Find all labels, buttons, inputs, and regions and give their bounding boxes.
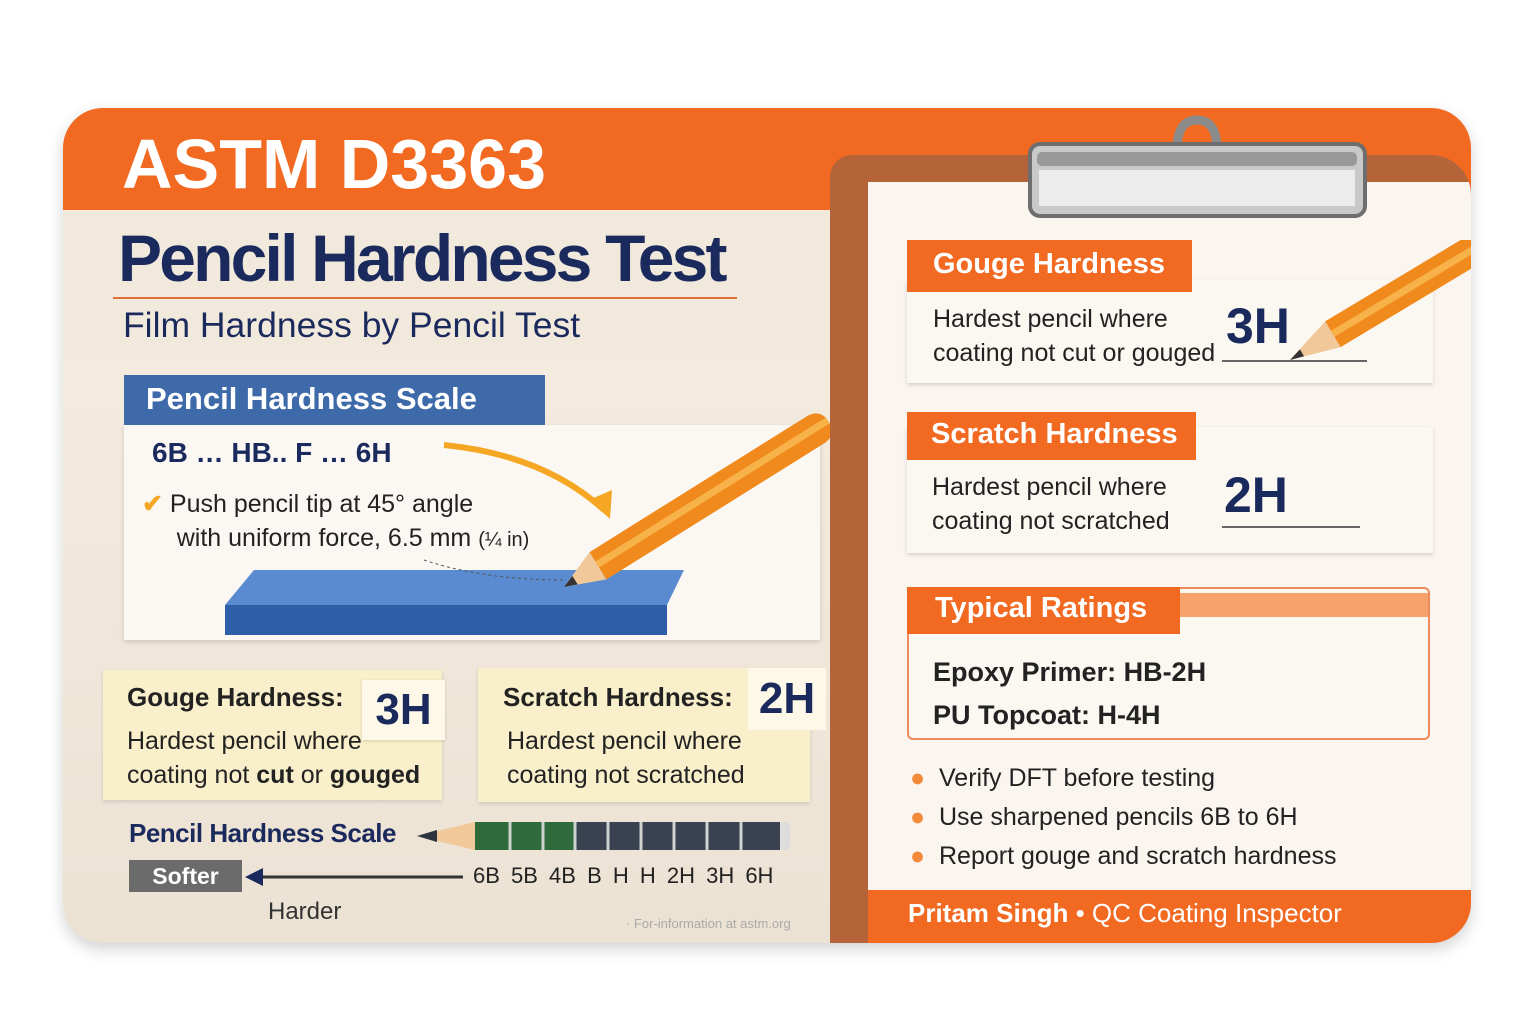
panel: scratch hardness (right): Scratch Hardness — [931, 418, 1178, 450]
harder label: Harder — [268, 898, 341, 925]
badge 2H — [748, 668, 826, 730]
instruction text — [142, 490, 529, 552]
heading: Pencil Hardness Test — [118, 221, 725, 295]
panel: scratch hardness note: Hardest pencil where — [507, 727, 742, 755]
icon: clipboard clip — [1028, 116, 1367, 218]
panel: gouge hardness (right): 3H — [1226, 298, 1290, 354]
softer label: Softer — [152, 863, 219, 889]
badge 2H: 2H — [759, 674, 815, 723]
panel: gouge hardness note: Hardest pencil where — [127, 727, 362, 755]
instruction text: with uniform force, 6.5 mm (¼ in) — [177, 524, 529, 552]
footnote: · For-information at astm.org — [626, 916, 791, 931]
panel: typical ratings: Typical Ratings — [935, 592, 1147, 624]
bullet list — [910, 764, 1336, 870]
scale text: 6B … HB.. F … 6H — [152, 437, 392, 468]
paper — [868, 182, 1471, 943]
title: ASTM D3363 — [122, 125, 546, 203]
panel: typical ratings: Epoxy Primer: HB-2H — [933, 657, 1206, 687]
panel: scratch hardness (right): Hardest pencil where — [932, 473, 1167, 501]
illustration: slab, arrow, pencil — [225, 413, 830, 635]
arrow: softer — [245, 868, 463, 886]
scale grades: 6B 5B 4B B H H 2H 3H 6H — [473, 863, 773, 888]
panel: scratch hardness (right): coating not scratched — [932, 507, 1170, 535]
panel: gouge hardness (right): Gouge Hardness — [933, 248, 1165, 280]
panel: scratch hardness note: Scratch Hardness: — [503, 682, 733, 712]
subtitle: Film Hardness by Pencil Test — [123, 305, 580, 345]
scale pencil graphic — [417, 822, 790, 850]
badge 3H: 3H — [375, 685, 432, 734]
footer: Pritam Singh • QC Coating Inspector — [908, 898, 1342, 928]
bullet list: ● Report gouge and scratch hardness — [910, 842, 1336, 870]
panel: gouge hardness (right): coating not cut or gouged — [933, 339, 1215, 367]
bullet list: ● Verify DFT before testing — [910, 764, 1215, 792]
tab heading — [124, 375, 545, 425]
panel: scratch hardness note: coating not scratched — [507, 761, 745, 789]
bullet list: ● Use sharpened pencils 6B to 6H — [910, 803, 1298, 831]
scale heading: Pencil Hardness Scale — [129, 818, 396, 848]
softer label — [129, 860, 242, 892]
panel: gouge hardness note: Gouge Hardness: — [127, 682, 344, 712]
panel: scratch hardness (right): 2H — [1224, 467, 1288, 523]
panel: gouge hardness (right) — [906, 240, 1434, 386]
panel: pencil hardness scale — [122, 375, 830, 644]
panel: scratch hardness note — [477, 668, 826, 805]
panel: scratch hardness (right) — [906, 412, 1434, 556]
panel: gouge hardness note — [102, 670, 446, 803]
tab heading: Pencil Hardness Scale — [146, 381, 477, 416]
panel: gouge hardness note: coating not cut or gouged — [127, 761, 420, 789]
footer — [868, 890, 1471, 943]
card background — [63, 108, 1471, 943]
panel: gouge hardness (right): Hardest pencil where — [933, 305, 1168, 333]
instruction text: ✔ Push pencil tip at 45° angle — [142, 490, 473, 518]
icon: pencil (right) — [1290, 240, 1471, 360]
badge 3H — [362, 680, 445, 740]
panel: typical ratings — [907, 587, 1430, 740]
panel: typical ratings: PU Topcoat: H-4H — [933, 700, 1160, 730]
clipboard — [830, 155, 1471, 943]
